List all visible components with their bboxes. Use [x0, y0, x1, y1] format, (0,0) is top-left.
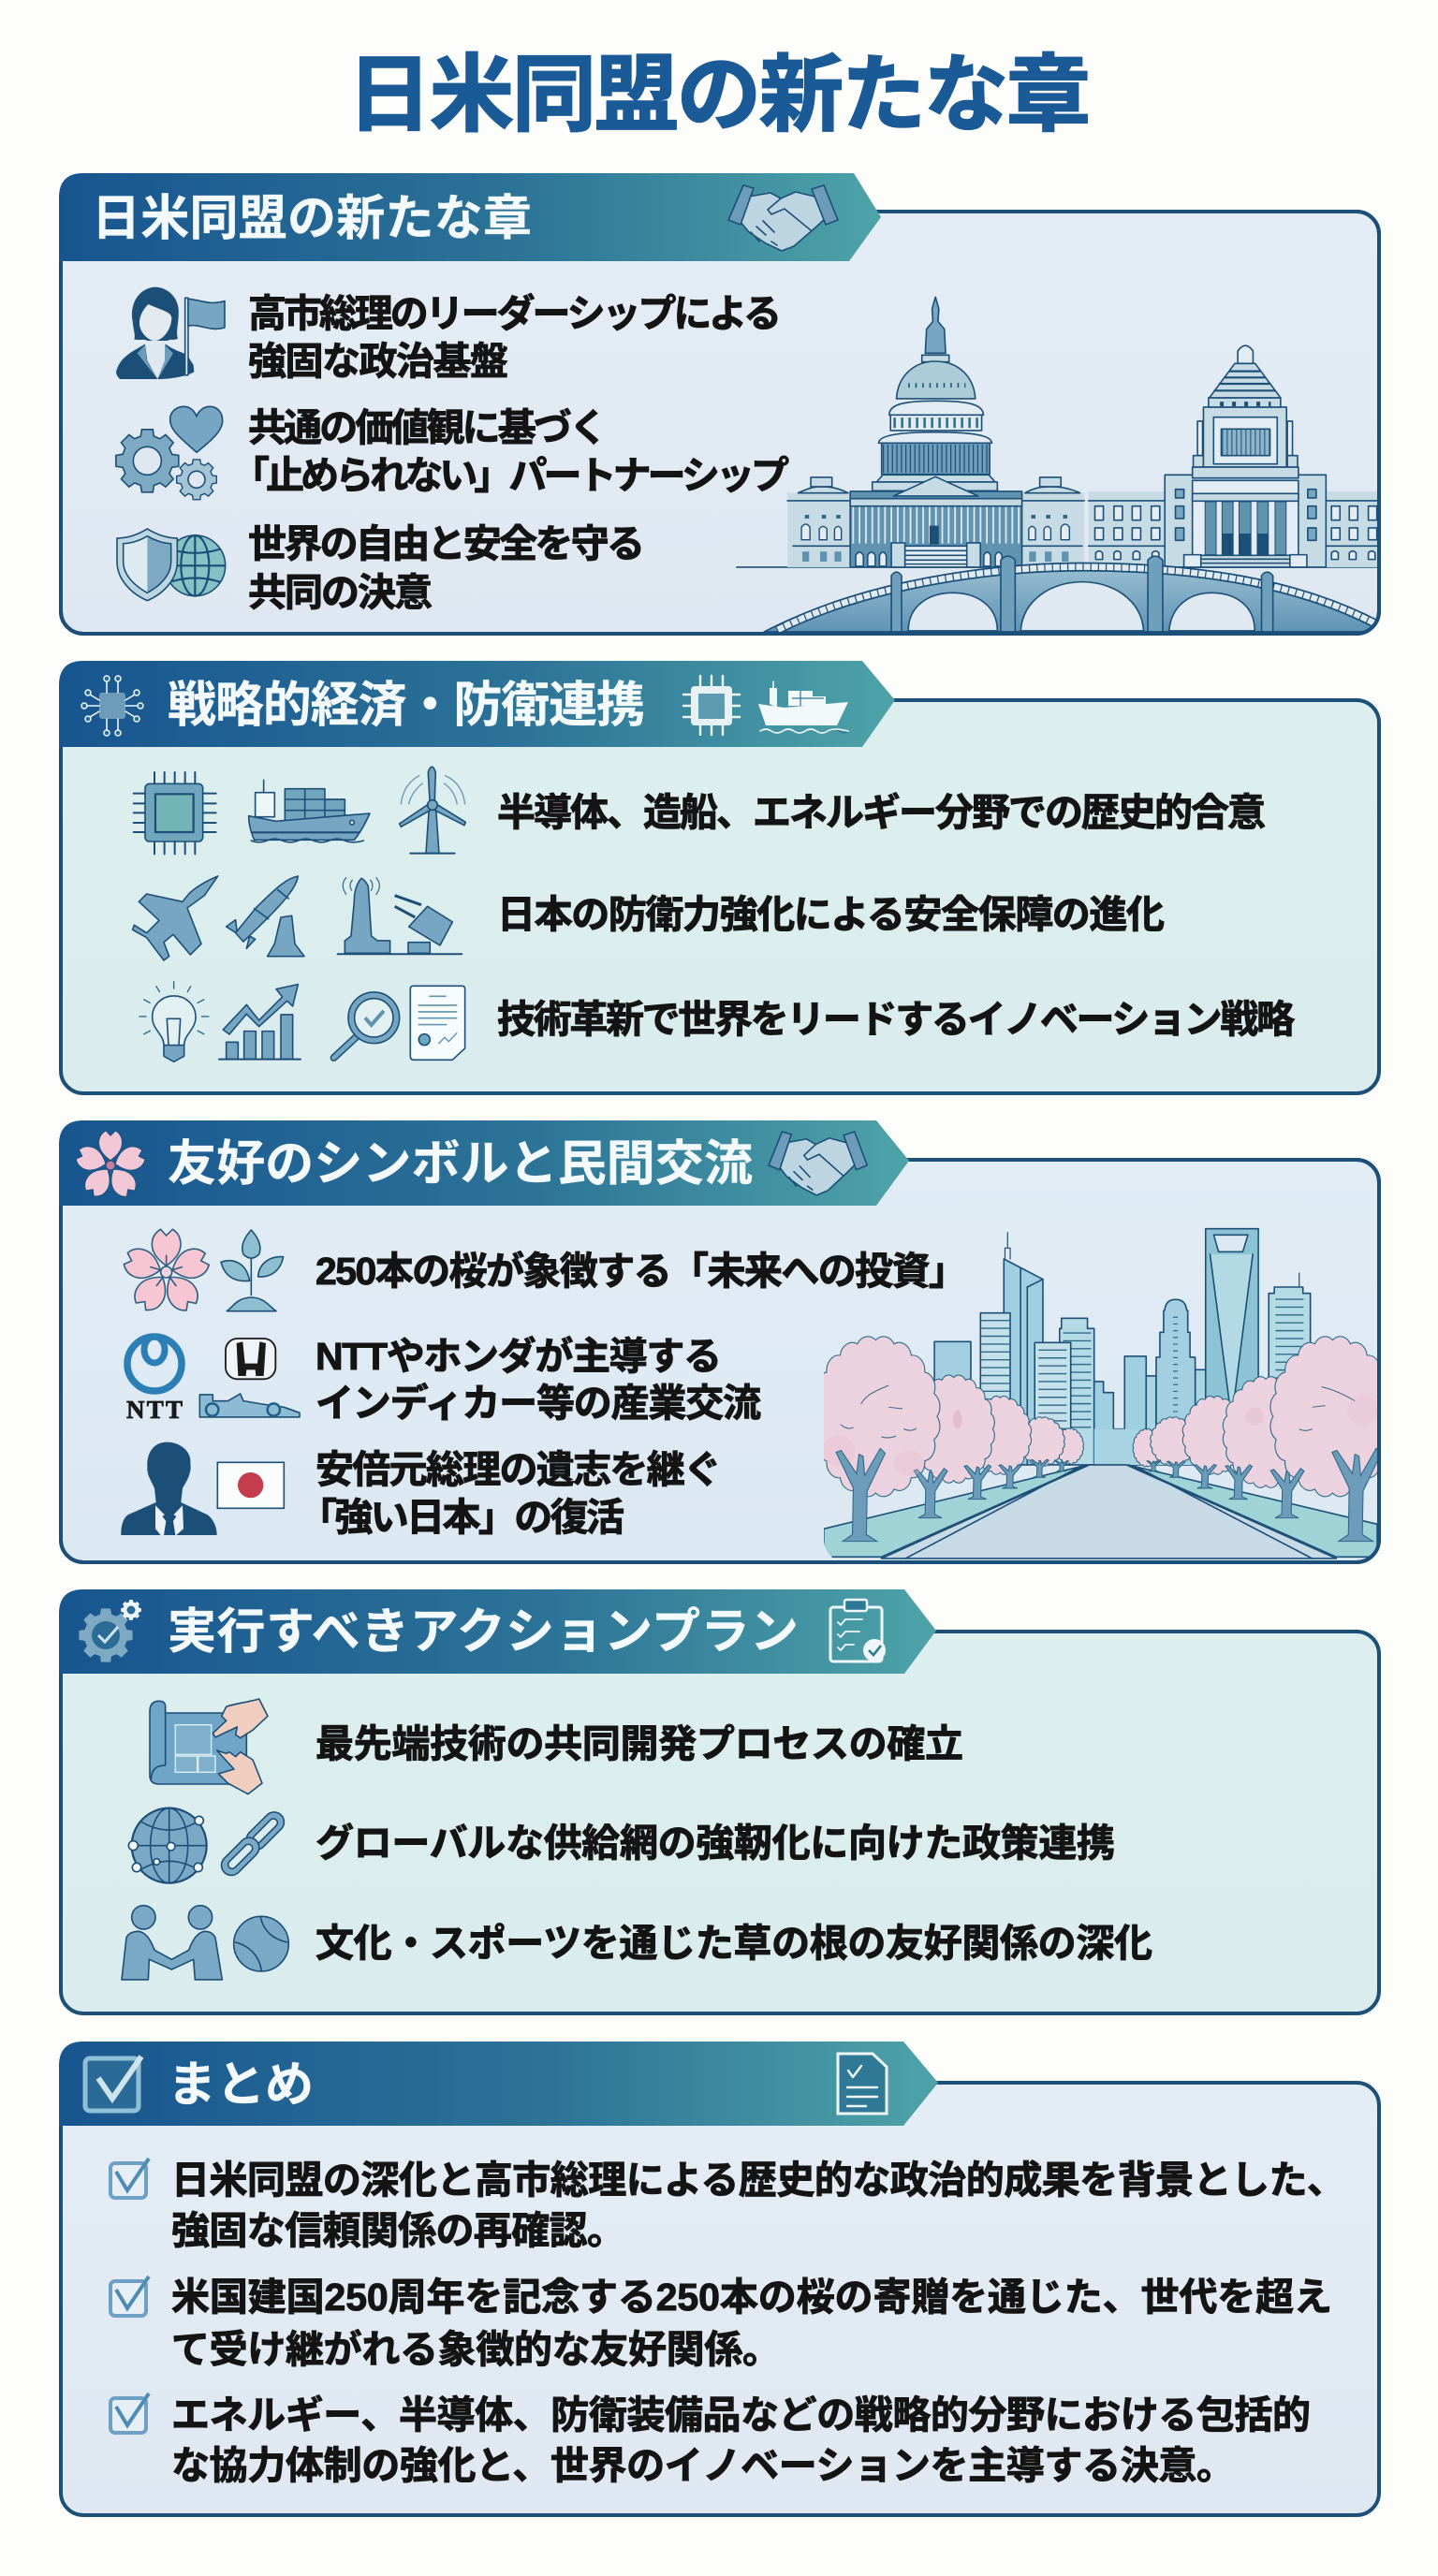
icon: chain link	[217, 1808, 288, 1880]
icon: cherry blossom	[74, 1131, 147, 1200]
icon: gear with check	[79, 1600, 141, 1662]
text: 日本の防衛力強化による安全保障の進化	[497, 893, 1165, 936]
ribbon header	[59, 661, 895, 747]
icon: wind turbine	[400, 767, 465, 854]
icon: magnifier and document	[334, 986, 465, 1060]
check icon	[110, 2276, 149, 2316]
text: 共通の価値観に基づく	[248, 406, 608, 449]
item: grassroots exchange	[122, 1906, 1152, 1980]
ribbon header	[59, 173, 881, 261]
item: supply chain	[128, 1808, 1115, 1883]
heading: 実行すべきアクションプラン	[168, 1605, 799, 1660]
grass	[824, 1465, 1088, 1557]
text: な協力体制の強化と、世界のイノベーションを主導する決意。	[171, 2444, 1235, 2487]
icon: semiconductor	[134, 772, 216, 854]
icon: document	[838, 2054, 887, 2114]
icon: race car	[199, 1394, 300, 1417]
text: NTTやホンダが主導する	[315, 1335, 722, 1378]
check icon	[110, 2393, 149, 2433]
icon: blueprint and hands	[150, 1699, 268, 1794]
text: て受け継がれる象徴的な友好関係。	[171, 2328, 781, 2371]
icon: cherry blossom	[122, 1229, 212, 1315]
icon: baseball	[234, 1916, 288, 1971]
icon: cargo ship	[758, 681, 848, 733]
Capitol wings and body	[787, 493, 1084, 567]
cherry trees, far to near	[1056, 1428, 1083, 1464]
illustration: Capitol, National Diet and bridge	[737, 297, 1379, 632]
item: sakura	[122, 1229, 967, 1315]
icon: sprout	[221, 1230, 284, 1311]
icon: container ship	[249, 780, 370, 842]
panel body	[61, 1632, 1379, 2013]
icon: shield and globe	[117, 529, 226, 601]
ribbon header	[59, 1589, 936, 1674]
panel body	[61, 700, 1379, 1093]
panel body	[61, 2083, 1379, 2515]
text: 半導体、造船、エネルギー分野での歴史的合意	[497, 791, 1266, 834]
summary item 1	[110, 2159, 1345, 2252]
panel: 日米同盟の新たな章	[59, 173, 1379, 634]
text: 強固な政治基盤	[248, 340, 508, 383]
icon: network globe	[128, 1808, 207, 1883]
item: economic agreements	[134, 767, 1266, 854]
text: 高市総理のリーダーシップによる	[248, 292, 782, 335]
summary item 3	[110, 2393, 1311, 2487]
text: インディカー等の産業交流	[315, 1382, 761, 1425]
ribbon header	[59, 2042, 938, 2126]
icon: clipboard	[830, 1600, 886, 1661]
summary item 2	[110, 2276, 1332, 2371]
title: 日米同盟の新たな章	[347, 49, 1091, 142]
illustration: city street with cherry trees	[812, 1229, 1395, 1559]
text: 安倍元総理の遺志を継ぐ	[315, 1448, 722, 1491]
icon: fighter jet	[133, 876, 218, 960]
item: innovation	[139, 981, 1295, 1061]
Capitol dome	[925, 297, 946, 353]
text: 技術革新で世界をリードするイノベーション戦略	[497, 998, 1295, 1041]
heading: 日米同盟の新たな章	[92, 192, 532, 246]
road	[881, 1465, 1336, 1559]
item: shared values	[116, 406, 789, 500]
check icon	[110, 2159, 149, 2198]
panel: 実行すべきアクションプラン	[59, 1589, 1379, 2013]
heading: 友好のシンボルと民間交流	[168, 1137, 753, 1192]
text: 共同の決意	[248, 571, 433, 614]
text: 「止められない」パートナーシップ	[231, 454, 789, 497]
Diet wings	[1089, 491, 1165, 567]
item: defence	[133, 876, 1165, 960]
item: Abe legacy	[121, 1442, 722, 1539]
item: freedom and security	[117, 522, 645, 614]
icon: growth chart	[219, 985, 301, 1060]
item: R&D process	[150, 1699, 963, 1794]
Diet central block	[1165, 475, 1326, 567]
text: 最先端技術の共同開発プロセスの確立	[315, 1722, 963, 1765]
text: 文化・スポーツを通じた草の根の友好関係の深化	[315, 1922, 1152, 1965]
text: 「強い日本」の復活	[299, 1496, 624, 1539]
text: エネルギー、半導体、防衛装備品などの戦略的分野における包括的	[171, 2393, 1311, 2437]
icon: suited man	[121, 1442, 217, 1535]
icon: radar tower and launcher	[338, 877, 462, 954]
item: industry exchange	[126, 1335, 761, 1425]
icon: chip	[683, 676, 740, 735]
logo: NTT	[126, 1337, 183, 1424]
icon: missile	[227, 876, 304, 957]
panel: 戦略的経済・防衛連携	[59, 661, 1379, 1093]
icon: two people shaking hands	[122, 1906, 222, 1980]
icon: Japanese flag	[217, 1462, 284, 1508]
icon: gears and heart	[116, 406, 223, 500]
text: 250本の桜が象徴する「未来への投資」	[315, 1250, 967, 1293]
icon: light bulb	[139, 981, 209, 1061]
icon: check box	[85, 2056, 141, 2111]
text: グローバルな供給網の強靭化に向けた政策連携	[315, 1822, 1115, 1865]
icon: handshake	[769, 1132, 867, 1195]
icon: circuit	[81, 676, 143, 736]
text: 強固な信頼関係の再確認。	[171, 2209, 625, 2252]
text: 世界の自由と安全を守る	[248, 522, 645, 565]
icon: woman with flag	[116, 287, 225, 379]
panel body	[61, 212, 1379, 634]
heading: 戦略的経済・防衛連携	[168, 679, 645, 733]
panel: まとめ	[59, 2042, 1379, 2515]
logo: Honda	[226, 1339, 275, 1379]
Diet tower	[1197, 421, 1203, 456]
item: leadership	[116, 287, 782, 383]
panel: 友好のシンボルと民間交流	[59, 1120, 1395, 1562]
logo: NTT: NTT	[126, 1396, 183, 1424]
ribbon header	[59, 1120, 909, 1206]
bridge	[764, 564, 1379, 632]
icon: handshake	[728, 185, 838, 251]
panel body	[61, 1160, 1379, 1562]
heading: まとめ	[168, 2058, 314, 2113]
Capitol portico	[850, 491, 1022, 567]
text: 米国建国250周年を記念する250本の桜の寄贈を通じた、世代を超え	[171, 2276, 1332, 2319]
text: 日米同盟の深化と高市総理による歴史的な政治的成果を背景とした、	[171, 2159, 1345, 2202]
